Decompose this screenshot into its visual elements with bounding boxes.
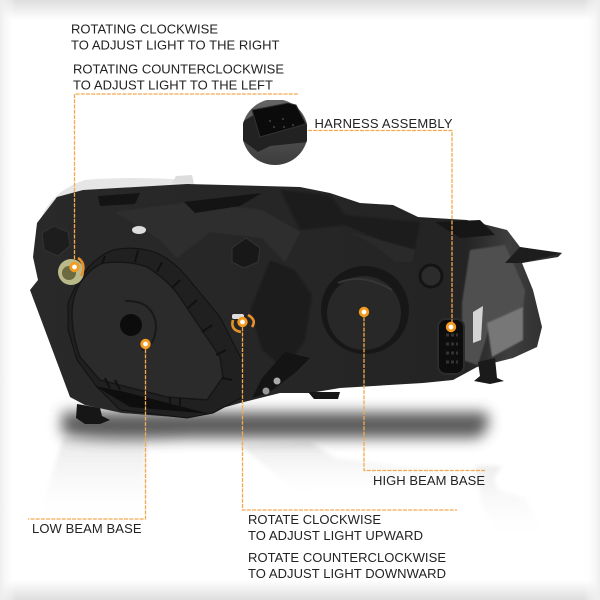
floor shadow [62,412,489,439]
harness inset [242,99,308,166]
mounting feet [76,404,110,424]
rear connector [438,319,464,374]
cover ribs [102,250,232,406]
clear lens rim [36,178,205,240]
label: rotate counterclockwise: TO ADJUST LIGHT DOWNWARD [248,566,446,581]
label: low beam base: LOW BEAM BASE [32,521,142,536]
orange rotation arrows [78,258,254,332]
right side light panels [462,245,525,365]
label: rotating clockwise: TO ADJUST LIGHT TO THE RIGHT [71,38,280,52]
label: rotate clockwise: ROTATE CLOCKWISE [248,512,381,527]
bracket screws [252,352,310,398]
label: harness assembly: HARNESS ASSEMBLY [314,116,453,131]
headlight reflection [36,438,541,545]
housing body [30,184,562,418]
marker dots [71,263,455,348]
label: rotating counterclockwise: ROTATING COUNTERCLOCKWISE [73,62,284,76]
small adjuster screw [232,314,244,319]
adjuster knobs [42,226,70,256]
label: high beam base: HIGH BEAM BASE [373,473,485,488]
high beam cover [321,266,409,354]
upper facets [115,202,300,262]
label: rotating clockwise [71,22,280,52]
callout lines [28,94,485,519]
label: rotate counterclockwise [248,550,446,581]
low beam cover [68,248,243,418]
label: rotate clockwise: TO ADJUST LIGHT UPWARD [248,528,423,543]
label: rotate clockwise [248,512,423,543]
label: rotating counterclockwise: TO ADJUST LIGHT TO THE LEFT [73,78,273,92]
label: rotating clockwise: ROTATING CLOCKWISE [71,22,218,36]
bulb socket [58,259,84,285]
label: rotating counterclockwise [73,62,284,92]
label: rotate counterclockwise: ROTATE COUNTERCLOCKWISE [248,550,446,565]
headlight unit [30,175,562,424]
